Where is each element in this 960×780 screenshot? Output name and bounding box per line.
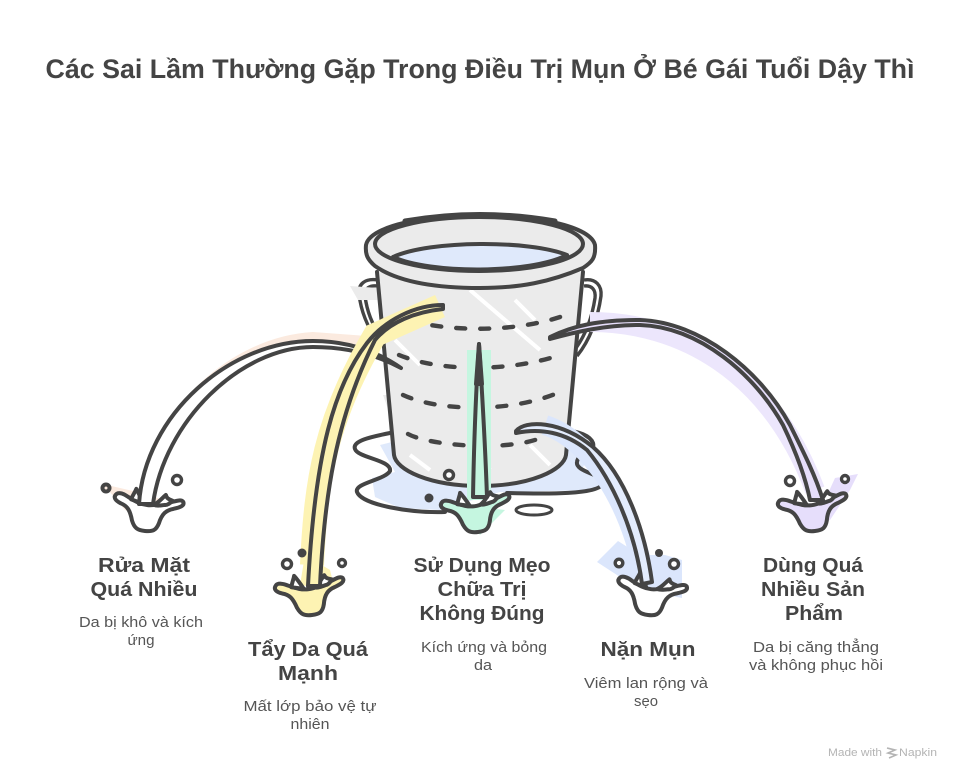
bucket body: [377, 272, 583, 486]
bucket: [350, 214, 601, 486]
label: Sử Dụng Mẹo Chữa Trị Không Đúng: Chữa Trị: [438, 579, 526, 601]
bucket rim: [366, 215, 595, 288]
label: Rửa Mặt Quá Nhiều: Da bị khô và kích: [79, 614, 203, 631]
leak dashes: [399, 315, 566, 446]
label: Sử Dụng Mẹo Chữa Trị Không Đúng: Kích ứng và bỏng: [421, 639, 547, 656]
title: Các Sai Lầm Thường Gặp Trong Điều Trị Mụn Ở Bé Gái Tuổi Dậy Thì: [46, 52, 914, 84]
label: Sử Dụng Mẹo Chữa Trị Không Đúng: Không Đúng: [420, 603, 544, 625]
label: Rửa Mặt Quá Nhiều: Rửa Mặt: [98, 555, 190, 577]
bucket handles: [359, 280, 601, 356]
stream: Nặn Mụn: [516, 424, 688, 619]
label: Nặn Mụn: Nặn Mụn: [600, 639, 696, 661]
label: Dùng Quá Nhiều Sản Phẩm: Nhiều Sản: [761, 579, 865, 601]
label: Dùng Quá Nhiều Sản Phẩm: Dùng Quá: [763, 555, 864, 577]
label: Dùng Quá Nhiều Sản Phẩm: [749, 555, 883, 674]
label: Nặn Mụn: sẹo: [634, 693, 658, 710]
watermark: Napkin: [899, 747, 937, 759]
puddle: [355, 430, 603, 512]
stream: Dùng Quá Nhiều Sản Phẩm: [550, 320, 858, 535]
label: Dùng Quá Nhiều Sản Phẩm: Da bị căng thẳng: [753, 638, 879, 656]
stream: Rửa Mặt: [100, 340, 401, 535]
label: Sử Dụng Mẹo Chữa Trị Không Đúng: [414, 555, 550, 674]
stream: Sử Dụng Mẹo Chữa Trị Không Đúng: [424, 344, 552, 536]
watermark: Made with: [828, 747, 882, 759]
label: Nặn Mụn: [584, 639, 709, 710]
label: Dùng Quá Nhiều Sản Phẩm: Phẩm: [785, 603, 843, 625]
water surface: [393, 244, 567, 270]
label: Rửa Mặt Quá Nhiều: [79, 555, 203, 649]
label: Tẩy Da Quá Mạnh: Mất lớp bảo vệ tự: [244, 698, 376, 715]
label: Nặn Mụn: Viêm lan rộng và: [584, 675, 709, 692]
label: Dùng Quá Nhiều Sản Phẩm: và không phục hồi: [749, 657, 883, 674]
label: Rửa Mặt Quá Nhiều: ứng: [128, 632, 154, 649]
label: Tẩy Da Quá Mạnh: nhiên: [290, 716, 330, 733]
label: Rửa Mặt Quá Nhiều: Quá Nhiều: [90, 579, 198, 601]
stream: Tẩy Da Quá Mạnh: [274, 305, 443, 619]
label: Tẩy Da Quá Mạnh: Tẩy Da Quá: [248, 639, 369, 661]
label: Tẩy Da Quá Mạnh: Mạnh: [278, 663, 338, 685]
watermark: [828, 747, 937, 759]
label: Sử Dụng Mẹo Chữa Trị Không Đúng: Sử Dụng Mẹo: [414, 555, 550, 577]
label: Sử Dụng Mẹo Chữa Trị Không Đúng: da: [474, 657, 493, 674]
label: Tẩy Da Quá Mạnh: [244, 639, 376, 733]
